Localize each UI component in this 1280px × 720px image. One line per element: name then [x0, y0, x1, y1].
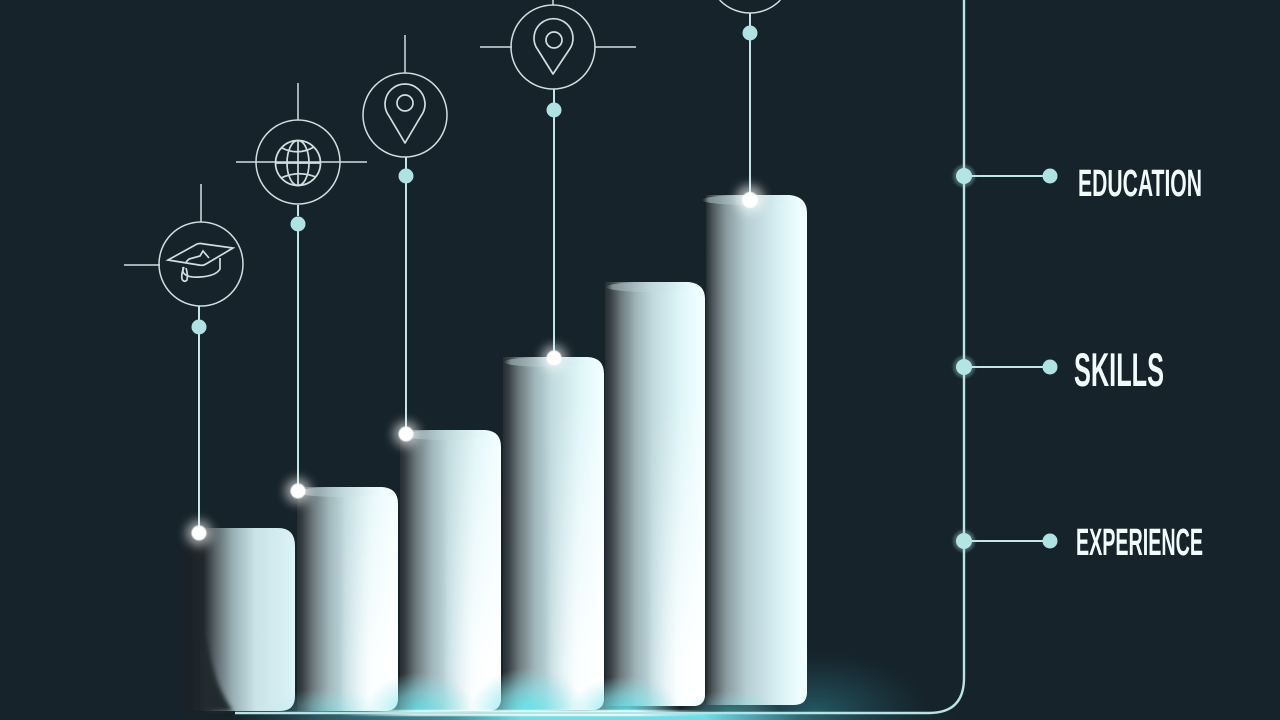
- icon: graduation cap: [168, 244, 233, 281]
- bar 3: [400, 430, 501, 711]
- connector line: bar 6: [736, 13, 764, 213]
- connector line: bar 3: [393, 157, 419, 447]
- axis line with rounded corner: [235, 0, 964, 713]
- marker: map pin one: [363, 35, 447, 157]
- marker: top circle, cropped: [720, 0, 780, 13]
- marker: graduation cap: [124, 184, 243, 306]
- legend item: experience: [953, 522, 1203, 564]
- icon: map pin one: [385, 84, 425, 143]
- floor glow: [230, 668, 960, 720]
- teal glow right of bars: [700, 650, 930, 713]
- connector line: bar 1: [186, 306, 212, 546]
- bar 5: [605, 282, 705, 706]
- icon: map pin two: [534, 19, 573, 74]
- bar chart: [178, 195, 807, 711]
- legend item: skills: [953, 343, 1164, 396]
- connector line: bar 4: [541, 89, 567, 371]
- icon: globe: [276, 140, 320, 186]
- bar 4: [503, 357, 604, 710]
- marker: map pin two: [480, 0, 636, 89]
- connector line: bar 2: [285, 205, 311, 504]
- marker: globe: [236, 83, 367, 204]
- label: skills: SKILLS: [1074, 343, 1164, 396]
- legend item: education: [953, 163, 1202, 205]
- bar 6: [702, 195, 807, 705]
- bar 2: [296, 487, 398, 711]
- bar 1: [178, 528, 295, 711]
